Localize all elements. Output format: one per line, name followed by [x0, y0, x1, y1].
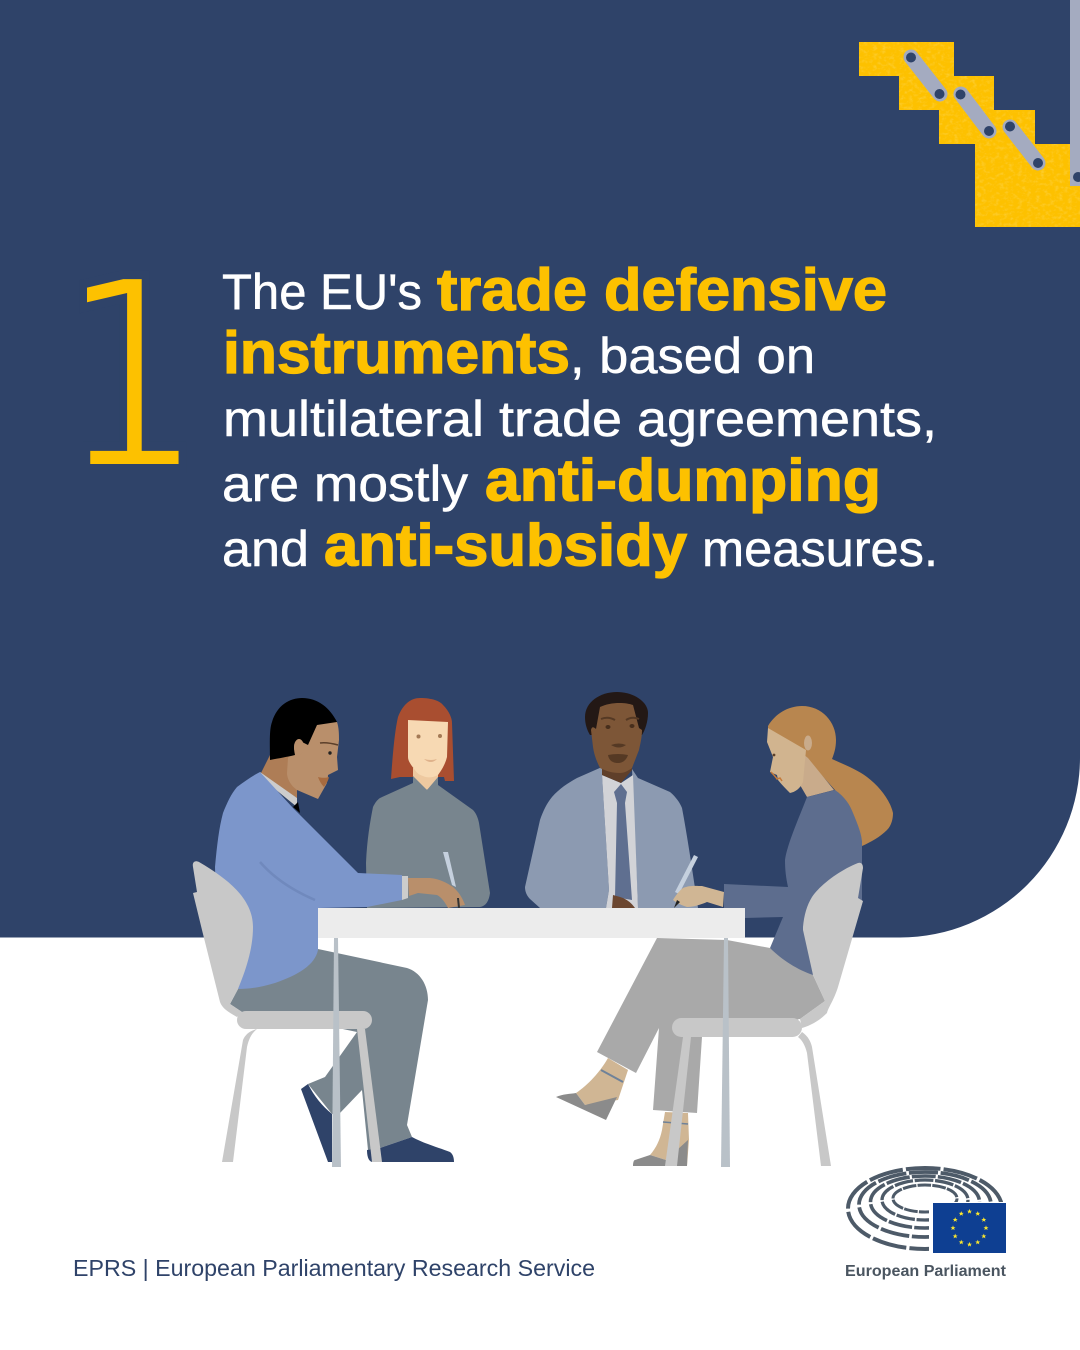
- chair on left: [193, 861, 382, 1162]
- right table leg: [721, 938, 730, 1167]
- vertical strap: [1070, 0, 1080, 186]
- man in blue sweater on left: [215, 698, 465, 1162]
- navy background panel: [0, 0, 1080, 938]
- logo wordmark: European Parliament: [845, 1263, 1007, 1280]
- pencil held by woman on right: [675, 855, 698, 894]
- table top: [318, 908, 745, 938]
- pencil held by man on left: [443, 852, 456, 887]
- yellow stepped paper: [859, 42, 1080, 227]
- headline text block: The EU's: [222, 264, 422, 320]
- European Parliament logo: [845, 1168, 1007, 1280]
- big numeral 1: 1: [58, 222, 204, 532]
- headline text block: multilateral trade agreements,: [223, 391, 937, 447]
- headline text block: anti-dumping: [485, 448, 881, 514]
- headline text block: are mostly: [222, 456, 468, 512]
- headline text block: instruments: [223, 320, 570, 386]
- illustration: four people meeting at a table: [193, 692, 893, 1167]
- headline text block: , based on: [570, 328, 815, 384]
- chair on right: [665, 863, 863, 1166]
- strap 1: [906, 52, 944, 99]
- man in grey jacket, seated behind table: [525, 692, 698, 908]
- headline text block: [222, 257, 938, 578]
- headline text block: measures.: [702, 521, 938, 577]
- footer credit: EPRS | European Parliamentary Research Service: [73, 1255, 595, 1281]
- decorative yellow stepped shape with straps: [859, 0, 1080, 227]
- headline text block: and: [222, 521, 309, 577]
- woman with red hair, seated behind table: [366, 698, 490, 908]
- headline text block: trade defensive: [437, 257, 887, 323]
- woman with long hair on right: [556, 706, 893, 1166]
- left table leg: [332, 938, 341, 1167]
- hemicycle rings: [848, 1168, 1002, 1249]
- headline text block: anti-subsidy: [324, 512, 687, 578]
- strap 2: [956, 90, 994, 136]
- paper texture: [859, 42, 1080, 227]
- EU flag: [933, 1203, 1006, 1253]
- strap 3: [1005, 122, 1043, 168]
